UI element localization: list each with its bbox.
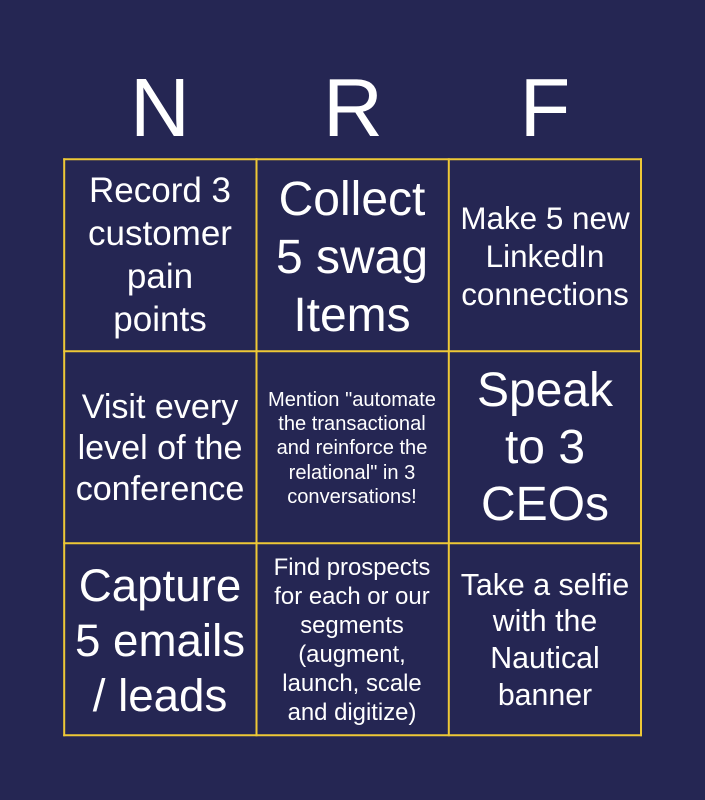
cell: speak to CEOs: to 3 [505, 420, 585, 474]
cell: mention automate: relational" in 3 [289, 462, 415, 484]
cell: LinkedIn connections [460, 200, 630, 312]
cell: selfie [461, 569, 629, 712]
cell: collect swag: Collect [279, 173, 425, 226]
cell: record pain points [88, 171, 232, 339]
cell: collect swag: Items [293, 289, 411, 342]
cell: visit every level [76, 388, 244, 508]
cell: find prospects [274, 554, 430, 726]
cell: collect swag [276, 173, 428, 342]
cell: find prospects: Find prospects [274, 554, 430, 581]
cell: capture emails: 5 emails [75, 614, 245, 666]
cell: find prospects: segments [300, 612, 404, 639]
cell: record pain points: customer [88, 214, 232, 253]
cell: speak to CEOs: CEOs [481, 478, 609, 530]
cell: selfie: Take a selfie [461, 569, 629, 602]
column heading: N: N [130, 61, 190, 154]
cell: record pain points: points [113, 300, 207, 339]
cell: LinkedIn connections: connections [461, 276, 629, 312]
cell: record pain points: pain [127, 257, 193, 296]
cell: mention automate: and reinforce the [277, 437, 427, 459]
cell: find prospects: and digitize) [288, 699, 416, 726]
cell: LinkedIn connections: Make 5 new [460, 200, 630, 236]
cell: selfie: with the [493, 605, 597, 638]
cell: speak to CEOs [477, 364, 613, 530]
cell: capture emails: Capture [79, 560, 241, 610]
cell: mention automate [268, 389, 436, 508]
cell: visit every level: Visit every [82, 388, 238, 426]
cell: visit every level: level of the [78, 428, 242, 466]
column heading: F: F [520, 61, 570, 154]
cell: mention automate: conversations! [287, 486, 417, 508]
cell: mention automate: Mention "automate [268, 389, 436, 411]
cell: mention automate: the transactional [278, 413, 426, 435]
cell: speak to CEOs: Speak [477, 364, 613, 416]
cell: selfie: Nautical [490, 642, 600, 675]
column heading: R: R [323, 61, 383, 154]
cell: record pain points: Record 3 [89, 171, 231, 210]
cell: find prospects: (augment, [298, 641, 406, 668]
bingo grid [63, 158, 642, 736]
cell: find prospects: launch, scale [282, 670, 422, 697]
cell: selfie: banner [498, 679, 592, 712]
cell: LinkedIn connections: LinkedIn [486, 238, 604, 274]
cell: capture emails: / leads [93, 670, 227, 720]
cell: find prospects: for each or our [274, 583, 430, 610]
cell: visit every level: conference [76, 470, 244, 508]
cell: capture emails [75, 560, 245, 720]
cell: collect swag: 5 swag [276, 231, 428, 284]
